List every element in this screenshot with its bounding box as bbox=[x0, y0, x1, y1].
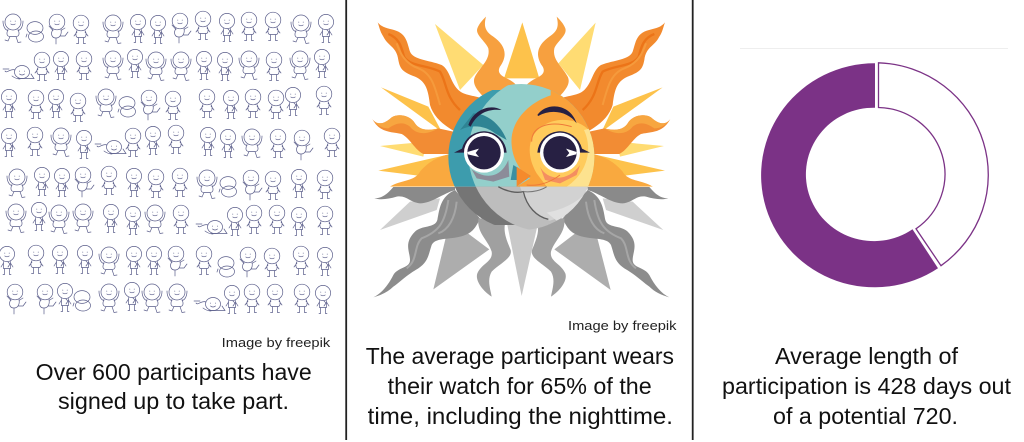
caption bbox=[36, 359, 312, 414]
panel: participation length bbox=[722, 48, 1012, 429]
caption: time, including the nighttime. bbox=[368, 403, 673, 429]
image credit: Image by freepik bbox=[568, 319, 677, 333]
caption: participation is 428 days out bbox=[722, 373, 1012, 399]
face bbox=[448, 84, 594, 230]
donut chart bbox=[761, 63, 988, 287]
caption: The average participant wears bbox=[366, 343, 674, 369]
panel: participants bbox=[0, 11, 340, 414]
caption bbox=[366, 343, 674, 429]
sun: upper half bbox=[372, 17, 670, 187]
eye left bbox=[454, 131, 507, 173]
eyebrows bbox=[468, 106, 577, 127]
icon: sun and moon face bbox=[372, 17, 670, 297]
caption bbox=[722, 343, 1012, 429]
moon: lower half in grey bbox=[373, 187, 669, 297]
divider left bbox=[345, 0, 347, 440]
caption: of a potential 720. bbox=[773, 403, 958, 429]
segment: remaining days bbox=[878, 63, 988, 266]
caption: Over 600 participants have bbox=[36, 359, 312, 385]
eye right bbox=[537, 131, 590, 173]
segment: 428 days bbox=[761, 63, 938, 287]
caption: Average length of bbox=[775, 343, 959, 369]
image credit: Image by freepik bbox=[222, 336, 331, 350]
panel: sun and moon bbox=[366, 17, 677, 429]
caption: their watch for 65% of the bbox=[388, 373, 652, 399]
caption: signed up to take part. bbox=[58, 388, 289, 414]
divider right bbox=[692, 0, 694, 440]
illustration: rows of stick figures bbox=[0, 11, 340, 314]
